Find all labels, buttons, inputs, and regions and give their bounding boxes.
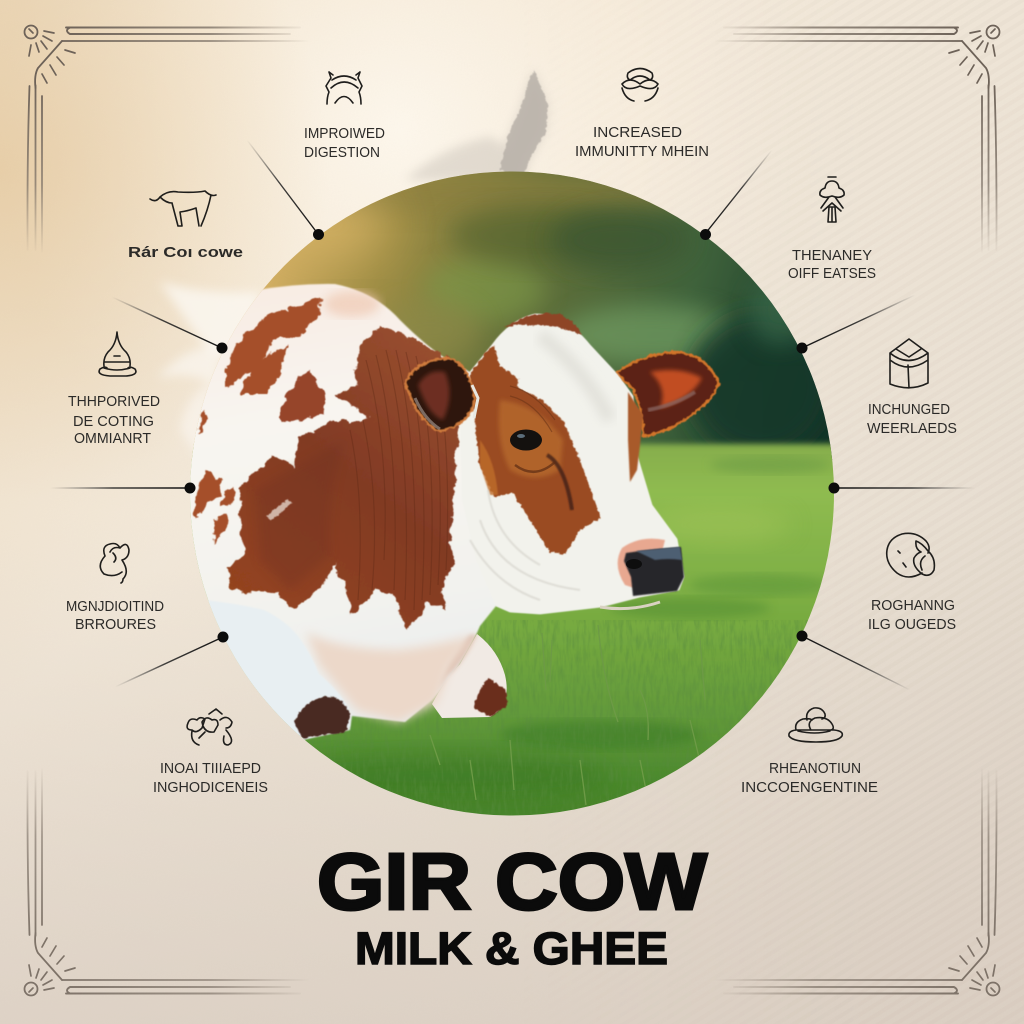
cow chest shade [306, 632, 475, 722]
shoulder coat folds [350, 350, 448, 610]
muzzle and nose [600, 539, 684, 609]
icon: round fruit and nut [887, 533, 934, 577]
label: OIFF EATSES [788, 265, 876, 282]
cow pink back highlight [324, 291, 380, 317]
circular photo: cow in meadow [190, 172, 834, 816]
benefit: floral topic [153, 709, 268, 796]
benefit: rare cow [128, 191, 243, 261]
misty hill silhouette behind the photo [405, 70, 548, 182]
icon: cow outline [150, 191, 216, 226]
benefit: round food topic [868, 533, 956, 633]
label: DIGESTION [304, 144, 380, 161]
mist wisps from cow rump [158, 282, 260, 460]
benefit: plate topic [741, 708, 878, 796]
icon: stupa dish [99, 332, 136, 376]
cow far knee [432, 634, 507, 718]
benefit: box topic [867, 339, 957, 437]
icon: flower cluster [187, 709, 232, 745]
rump patches [196, 297, 325, 543]
connector lines and dots [50, 140, 975, 690]
label: DE COTING [73, 413, 154, 430]
label: THENANEY [792, 247, 872, 264]
brown shoulder patch [228, 326, 458, 631]
cow front leg [205, 600, 350, 740]
label: BRROURES [75, 616, 156, 633]
label: IMMUNITTY MHEIN [575, 143, 709, 160]
cow body silhouette [150, 284, 684, 740]
label: IMPROIWED [304, 125, 385, 142]
label: INGHODICENEIS [153, 779, 268, 796]
label: THHPORIVED [68, 393, 160, 410]
subtitle: MILK & GHEE [355, 923, 668, 974]
icon: person figure [820, 177, 844, 222]
label: Rár Coı cowe [128, 244, 243, 261]
benefit: improved digestion [304, 72, 385, 161]
label: MGNJDIOITIND [66, 598, 164, 615]
near ear [405, 358, 478, 431]
label: INCCOENGENTINE [741, 779, 878, 796]
icon: knot [100, 544, 129, 583]
icon: digestion arch [326, 72, 362, 104]
label: WEERLAEDS [867, 420, 957, 437]
cow head [460, 313, 684, 614]
icon: ghee sweets on plate [789, 708, 842, 742]
icon: immunity bowl [622, 68, 658, 101]
label: OMMIANRT [74, 430, 151, 447]
benefit: increased immunity [575, 68, 709, 160]
label: ILG OUGEDS [868, 616, 956, 633]
far ear [616, 352, 719, 436]
photo backdrop: trees [180, 160, 850, 460]
benefit: person icon topic [788, 177, 876, 282]
photo backdrop: meadow [190, 440, 834, 816]
label: ROGHANNG [871, 597, 955, 614]
label: INCHUNGED [868, 401, 950, 418]
benefit: improved dosha [68, 332, 160, 447]
icon: ghee box [890, 339, 928, 388]
label: RHEANOTIUN [769, 760, 861, 777]
label: INOAI TIIIAEPD [160, 760, 261, 777]
title: GIR COW [317, 837, 708, 926]
benefit: knot topic [66, 544, 164, 633]
label: INCREASED [593, 124, 682, 141]
